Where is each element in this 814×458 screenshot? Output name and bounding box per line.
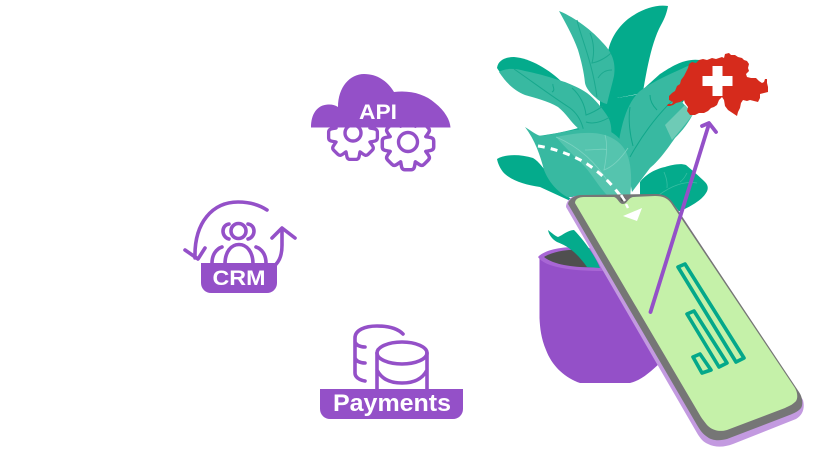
cycle arrow: left [185, 202, 267, 259]
people group [212, 224, 266, 264]
leaf: lower left dark [497, 155, 590, 210]
leaf: left big light [499, 69, 611, 137]
leaf: right dark back [640, 60, 700, 120]
dashed line over the notch [621, 195, 628, 208]
leaf: top back dark [605, 6, 668, 130]
small leaf inside pot [548, 230, 600, 268]
leaf: centre dark filler [600, 90, 650, 160]
leaf: front pale overlay [556, 133, 631, 197]
bar chart on screen [678, 264, 744, 373]
plant pot [538, 230, 660, 383]
back coin stack [355, 326, 403, 381]
smartphone [566, 194, 804, 447]
leaf: far left dark tip [497, 57, 563, 90]
leaf: top centre light [559, 11, 614, 104]
phone edge [566, 196, 804, 447]
icon: CRM people with cycle arrows [185, 202, 295, 293]
arrow to Switzerland [650, 123, 716, 312]
middle bar [687, 311, 727, 367]
label plate: CRM: CRM [212, 267, 266, 290]
cycle arrow: right [270, 228, 295, 269]
cloud shape [311, 74, 450, 128]
label: API: API [359, 101, 397, 124]
icon: API cloud with gears [311, 74, 450, 170]
icon: left gear [329, 111, 377, 159]
leaf: right big light [619, 65, 693, 192]
leaf: dark band behind the lower leaf [538, 127, 612, 150]
plant [497, 6, 708, 212]
icon: Payments coin stacks [320, 326, 463, 419]
phone screen [575, 196, 797, 431]
camera notch [620, 196, 626, 202]
phone bezel [568, 194, 802, 440]
short bar [693, 354, 711, 373]
leaf: right lower dark [640, 164, 708, 212]
pot interior [544, 250, 598, 267]
location pointer [623, 208, 642, 221]
front coin stack [377, 342, 427, 389]
dashed route line [538, 146, 628, 207]
map: Switzerland with white cross [667, 53, 768, 116]
pot rim [538, 247, 640, 271]
icon: right gear [382, 118, 434, 170]
pot body [540, 258, 660, 383]
map outline [667, 53, 768, 116]
leaf: lower left light [525, 127, 631, 197]
label plate: Payments: Payments [333, 390, 451, 417]
white cross [702, 66, 732, 96]
tall bar [678, 264, 744, 362]
